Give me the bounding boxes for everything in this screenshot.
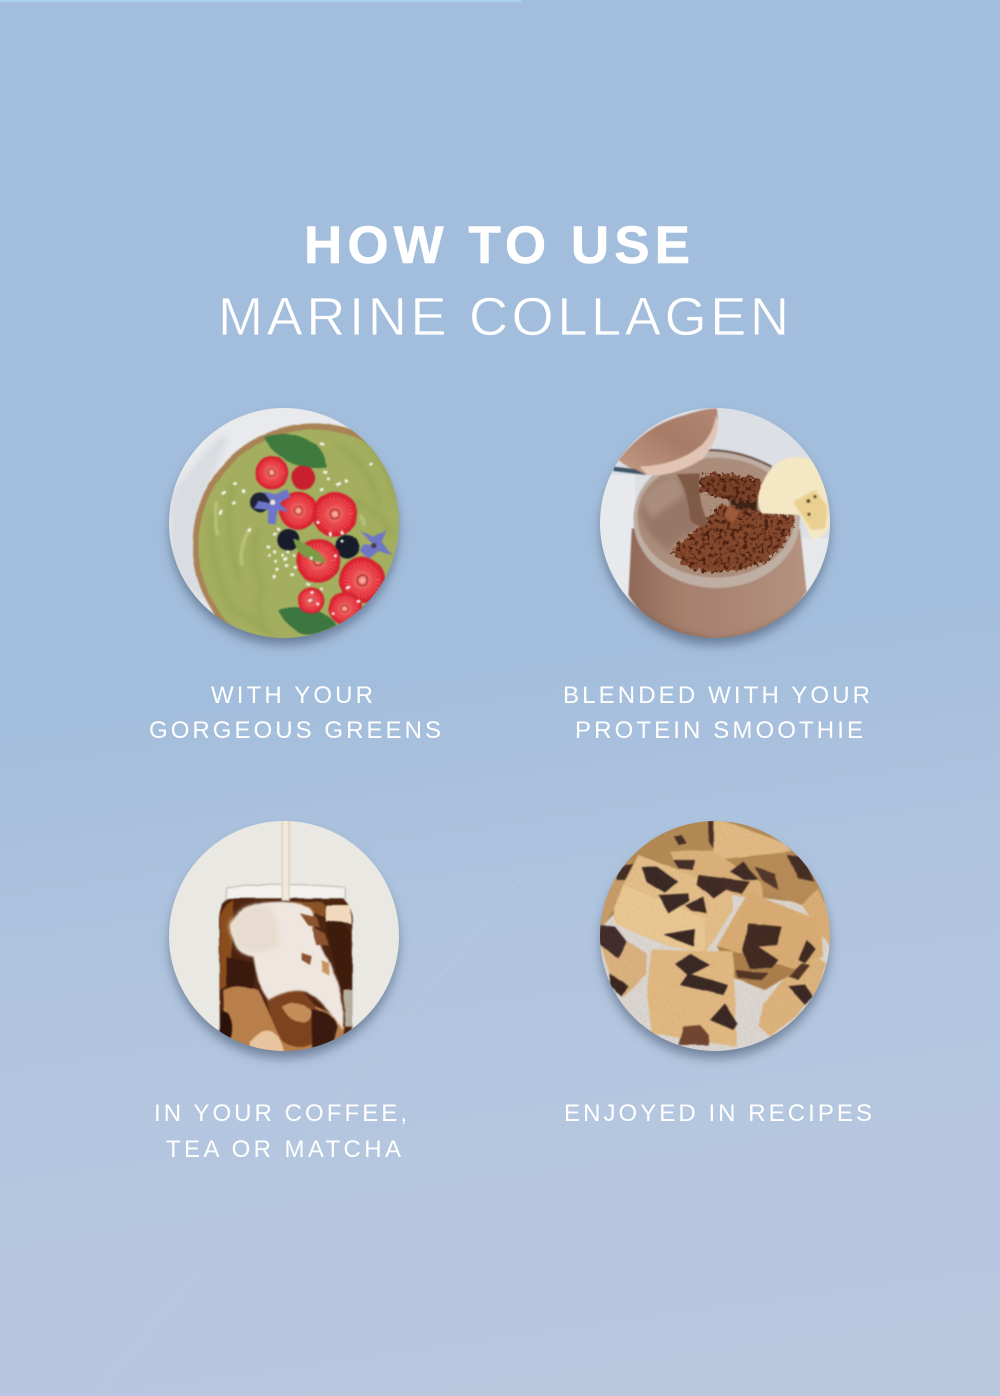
borage flowers: [253, 489, 291, 524]
milk stream: [282, 817, 290, 901]
photo circle: chocolate chunk blondies: [595, 821, 835, 1064]
caption: with your gorgeous greens: GORGEOUS GREENS: [149, 717, 441, 744]
photo circle: matcha green smoothie bowl: [164, 408, 404, 651]
pouring drip: [677, 473, 709, 526]
caption: blended with your protein smoothie: [563, 682, 870, 744]
glass: [219, 884, 352, 1043]
bowl rim: [192, 422, 367, 626]
spoon: [618, 408, 718, 475]
photo circle: iced coffee with milk: [164, 821, 404, 1064]
caption: blended with your protein smoothie: BLENDED WITH YOUR: [563, 682, 870, 709]
caption: enjoyed in recipes: ENJOYED IN RECIPES: [564, 1100, 872, 1127]
banana slice: [758, 457, 830, 539]
centre bottom block: [647, 950, 737, 1047]
caption: in your coffee, tea or matcha: IN YOUR COFFEE,: [154, 1100, 407, 1127]
glass rim: [633, 450, 800, 588]
title: MARINE COLLAGEN: [218, 287, 789, 347]
mint leaves: [264, 434, 327, 468]
right bottom block: [759, 957, 827, 1037]
caption: in your coffee, tea or matcha: TEA OR MATCHA: [166, 1136, 401, 1163]
caption: with your gorgeous greens: [149, 682, 441, 744]
glass body: [628, 528, 807, 640]
title: HOW TO USE: [304, 216, 690, 275]
title: [218, 216, 789, 347]
cocoa powder: [670, 503, 795, 572]
top highlight bar: [0, 0, 521, 2]
caption: in your coffee, tea or matcha: [154, 1100, 407, 1163]
photo circle: chocolate protein smoothie: [595, 408, 835, 651]
faint diagonal light streak: [95, 880, 520, 1396]
back blocks: [606, 821, 826, 923]
blueberries: [250, 492, 270, 512]
chocolate chunks: [642, 867, 678, 893]
caramel swirl: [223, 987, 345, 1057]
caption: with your gorgeous greens: WITH YOUR: [211, 682, 373, 709]
milk cloud: [230, 902, 344, 1030]
strawberries: [255, 456, 288, 489]
main front block: [613, 855, 733, 953]
caption: blended with your protein smoothie: PROTEIN SMOOTHIE: [575, 717, 863, 744]
right block: [717, 892, 822, 990]
left bottom block: [600, 942, 647, 997]
coconut flakes: [220, 443, 373, 614]
